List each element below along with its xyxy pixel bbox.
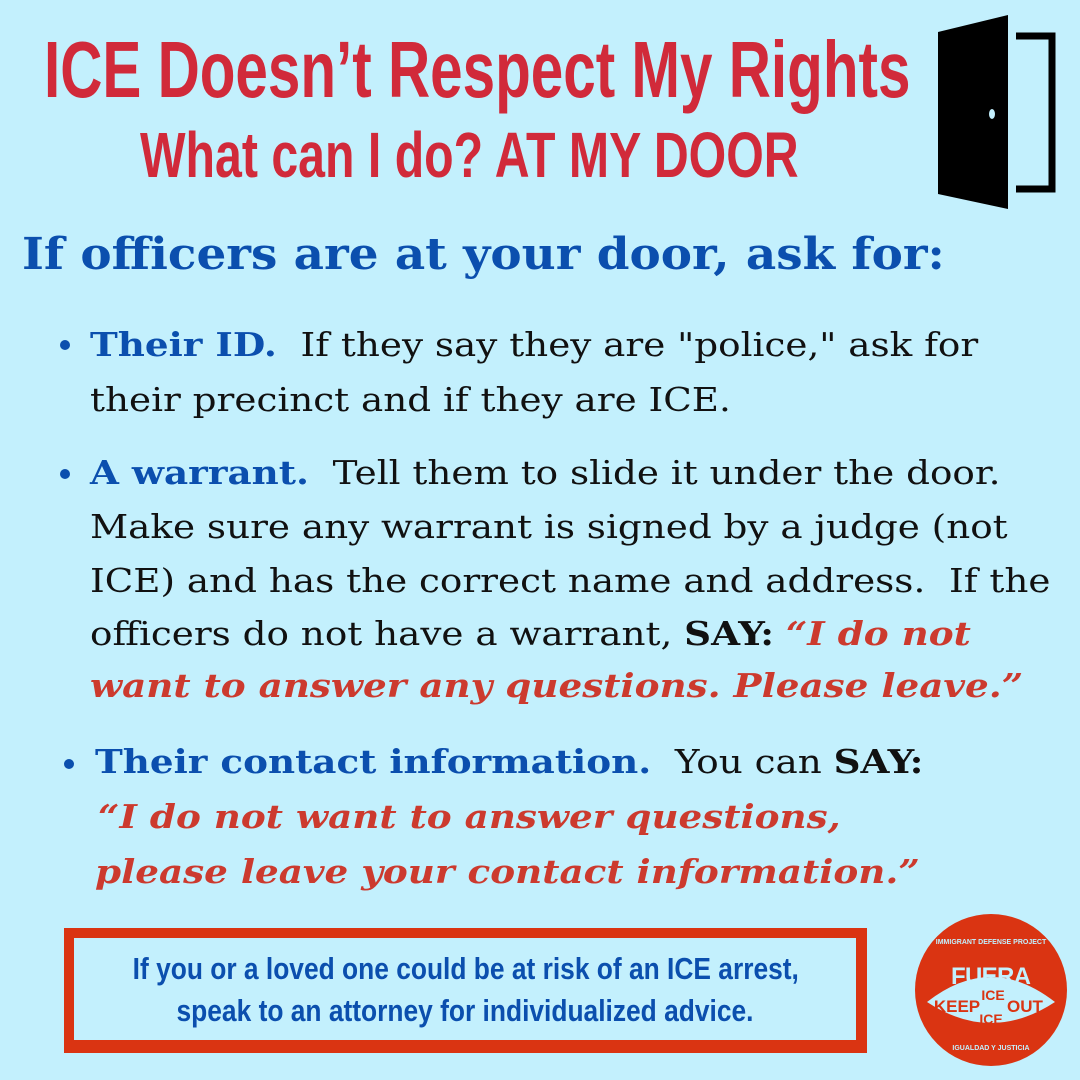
bullet: warrant: ICE) and has the correct name and address. If the (90, 561, 1050, 600)
logo: IGUALDAD Y JUSTICIA (952, 1045, 1030, 1052)
bullet: ID (60, 325, 978, 419)
bullet: contact (64, 742, 923, 891)
logo: FUERA (951, 963, 1031, 990)
callout box (64, 928, 867, 1053)
bullet list (60, 325, 1050, 891)
subtitle: What can I do? AT MY DOOR (140, 119, 799, 191)
callout box: If you or a loved one could be at risk of an ICE arrest, (133, 951, 799, 986)
bullet: ID: their precinct and if they are ICE. (90, 380, 731, 419)
bullet: warrant (60, 453, 1050, 705)
bullet: contact: “I do not want to answer questions, (98, 797, 841, 836)
icon: door (938, 15, 1056, 209)
heading: If officers are at your door, ask for: (22, 229, 945, 280)
logo: KEEP (934, 997, 980, 1016)
bullet: warrant: A warrant. Tell them to slide it under the door. (90, 453, 1000, 492)
callout box: speak to an attorney for individualized advice. (177, 993, 753, 1028)
bullet: contact: please leave your contact information.” (95, 852, 920, 891)
title: ICE Doesn’t Respect My Rights (44, 25, 910, 114)
logo (915, 914, 1067, 1066)
bullet: contact: Their contact information. You can SAY: (95, 742, 923, 781)
bullet: warrant: want to answer any questions. Please leave.” (90, 666, 1023, 705)
logo: IMMIGRANT DEFENSE PROJECT (936, 939, 1047, 946)
bullet: ID: Their ID. If they say they are "police," ask for (90, 325, 978, 364)
bullet: warrant: officers do not have a warrant, SAY: “I do not (90, 614, 971, 653)
logo: ICE (981, 987, 1005, 1003)
logo: ICE (979, 1011, 1003, 1027)
logo: OUT (1007, 997, 1044, 1016)
bullet: warrant: Make sure any warrant is signed by a judge (not (90, 507, 1008, 546)
